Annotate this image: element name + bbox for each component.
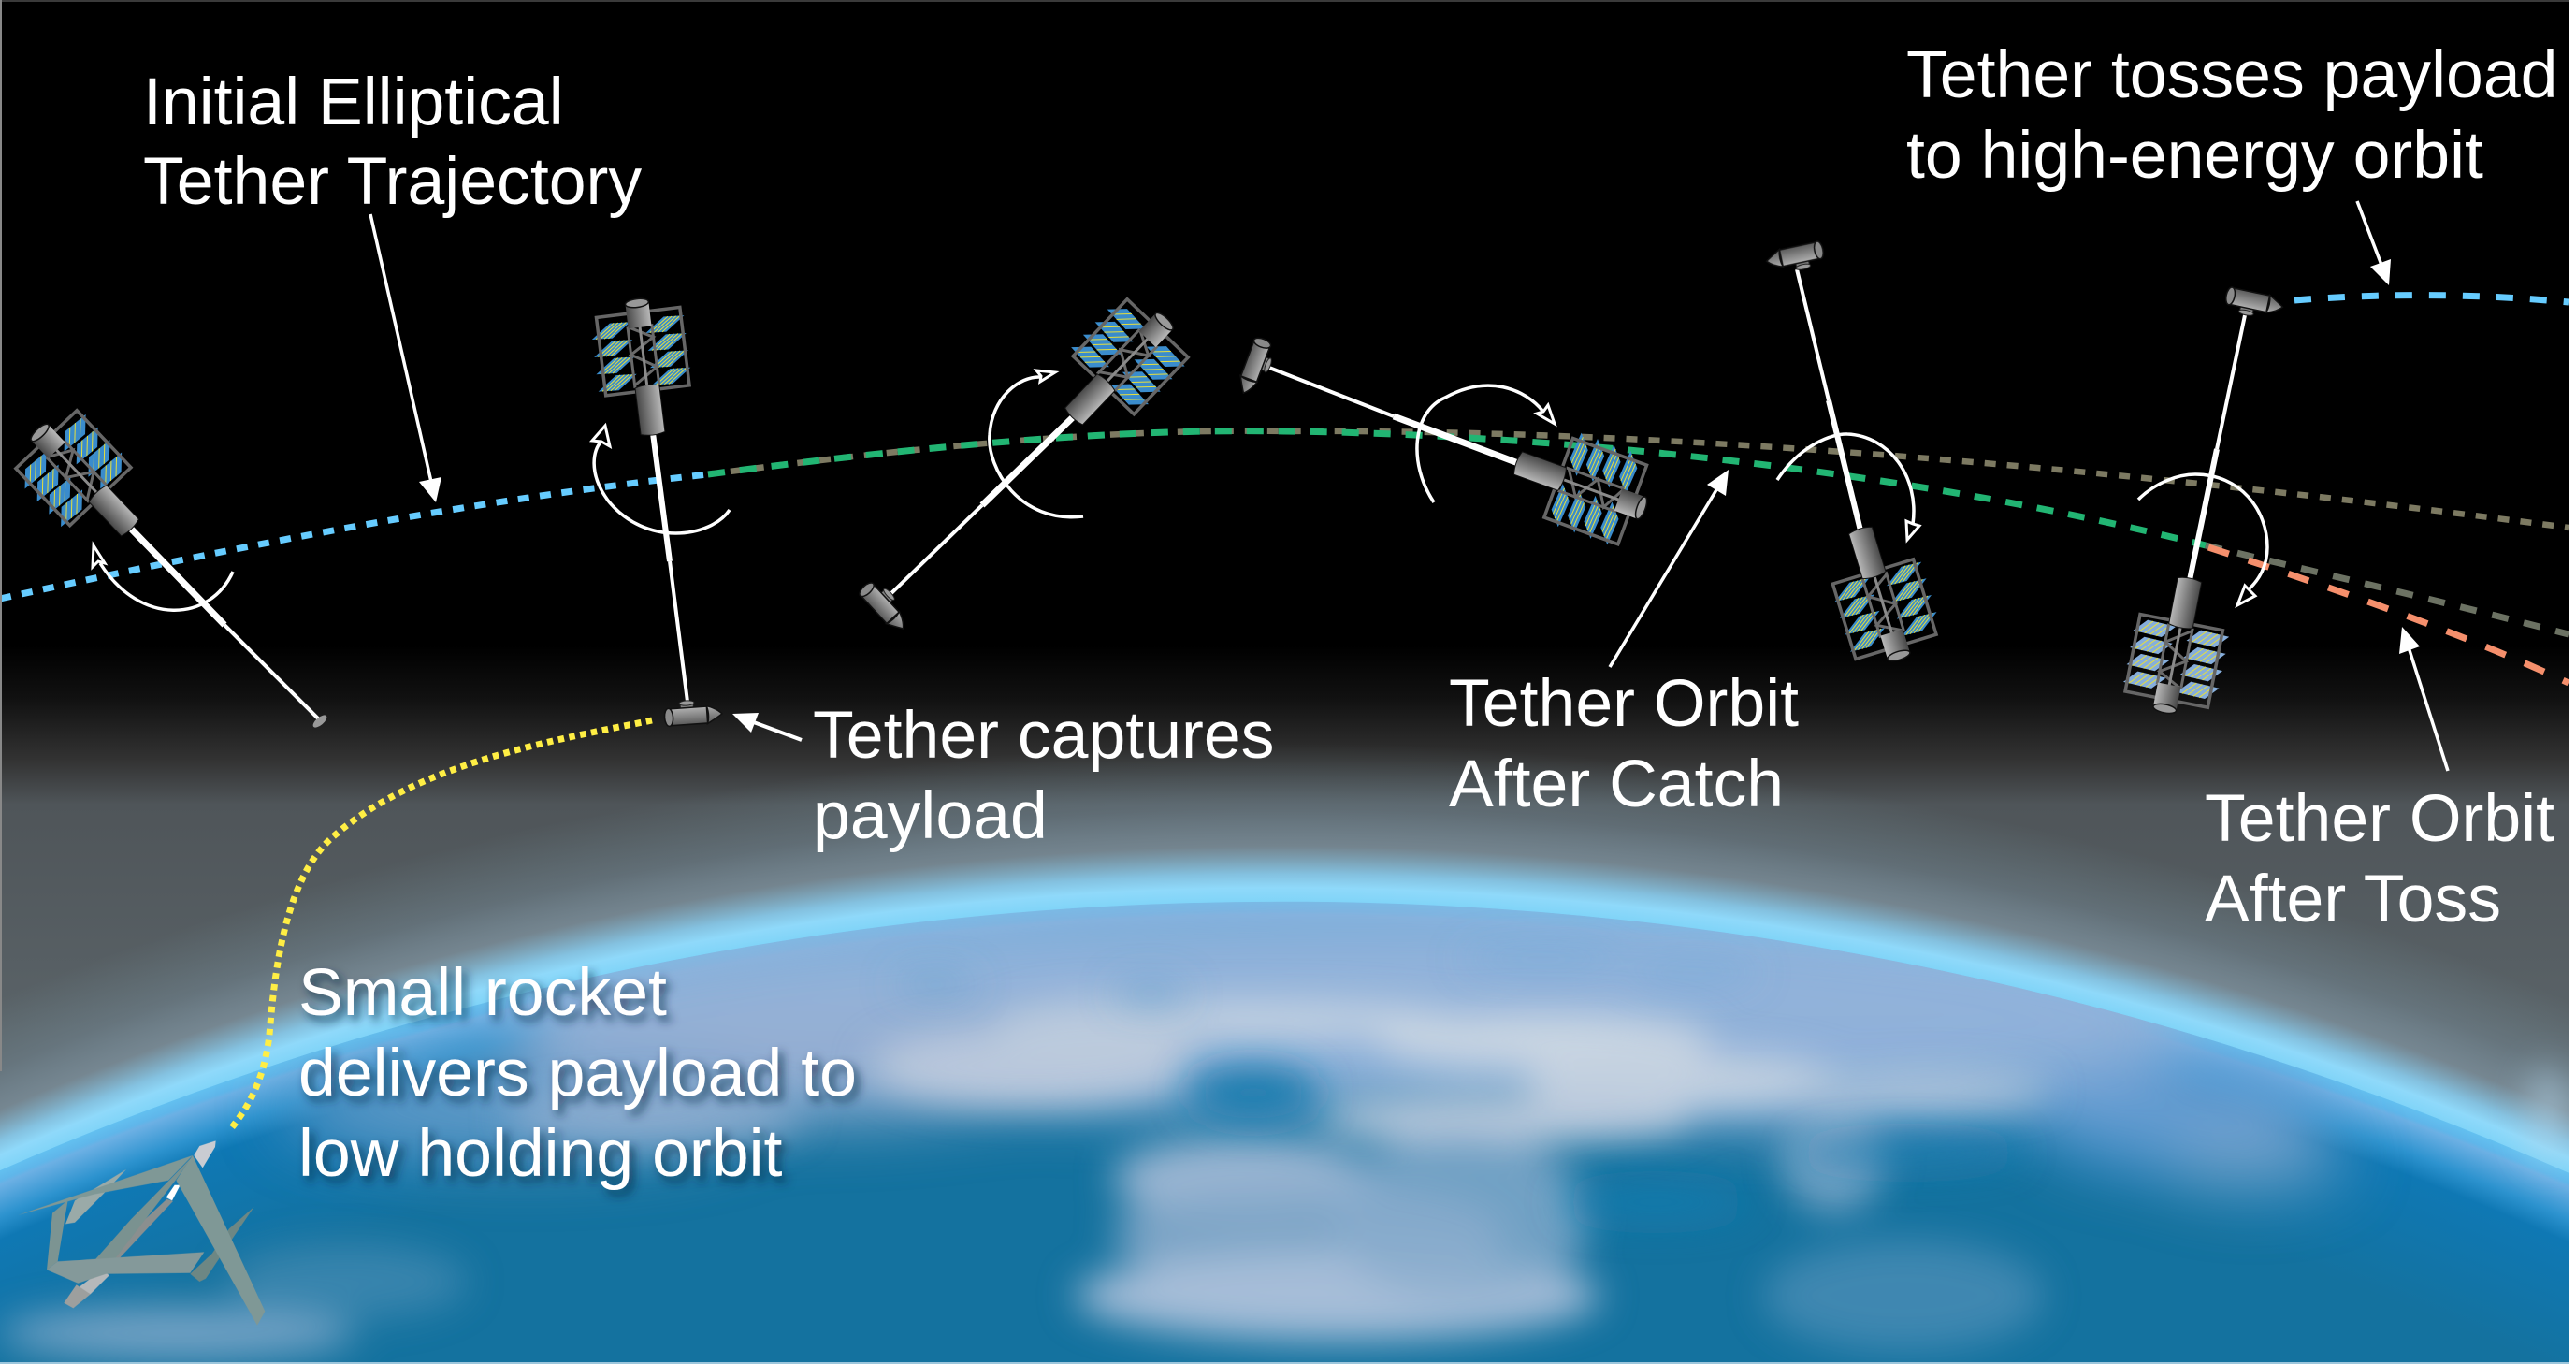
payload 1 (edge on) [311, 713, 328, 730]
frame edge: right margin [2569, 0, 2576, 1364]
dark gaps in clouds [893, 952, 2020, 1221]
label: tether tosses payload: to high-energy orbit [1906, 118, 2483, 193]
label: small rocket delivers payload: low holding orbit [298, 1116, 782, 1191]
tether orbit after catch (green dashed) [708, 431, 2206, 545]
satellite body 3 [1036, 284, 1200, 449]
tether 2 [653, 433, 687, 702]
earth with clouds [0, 902, 2576, 1364]
tether 3 [889, 416, 1074, 596]
left vertical [47, 1200, 68, 1270]
rotation arrow 1 [93, 545, 233, 610]
tethered satellite 2 [587, 294, 730, 727]
rocket payload trajectory (yellow dotted) [232, 720, 652, 1127]
label: initial elliptical tether trajectory: Initial Elliptical [143, 65, 564, 139]
icon: launch aircraft with rocket [18, 1140, 265, 1326]
payload 2 [663, 698, 723, 727]
payload 6 [2223, 286, 2284, 322]
lower horizontal wing [47, 1252, 204, 1284]
label: tether orbit after catch: After Catch [1449, 747, 1784, 821]
after catch continuation (gray-green dashed) [2206, 545, 2569, 634]
payload 5 [1765, 240, 1826, 276]
fuselage strake [94, 1156, 193, 1261]
tether 4 [1269, 368, 1518, 463]
payload 4 [1236, 336, 1279, 399]
label: tether captures payload: payload [813, 778, 1048, 853]
pointer arrow: orbit after toss [2399, 627, 2448, 771]
left rear fin [65, 1169, 126, 1224]
pointer arrow: tether captures payload [732, 713, 802, 740]
satellite body 1 [1, 398, 165, 563]
label: tether orbit after catch: Tether Orbit [1449, 666, 1799, 741]
pointer arrow: high-energy orbit [2357, 201, 2391, 285]
initial tether trajectory (blue dashed) [0, 474, 708, 599]
tethered satellite 3 [858, 284, 1200, 634]
high-energy payload orbit (cyan dashed) [2294, 296, 2569, 302]
big right wing [176, 1155, 265, 1326]
tether orbit after toss (salmon dashed) [2208, 547, 2569, 683]
atmosphere glow [0, 692, 2576, 1364]
satellite body 5 [1816, 515, 1946, 673]
initial orbit continuation (tan dashed) [708, 431, 2569, 528]
payload 3 [858, 576, 915, 634]
rotation arrow 6 [2138, 474, 2267, 605]
rotation arrow 2 [592, 426, 730, 533]
label: tether orbit after toss: Tether Orbit [2205, 781, 2554, 856]
earth surface [0, 902, 2576, 1364]
bright clouds [0, 1001, 2048, 1359]
tethered satellite 1 [1, 398, 328, 730]
label: tether tosses payload: Tether tosses payload [1906, 37, 2557, 112]
satellite body 4 [1500, 415, 1662, 553]
pointer arrow: orbit after catch [1610, 470, 1729, 667]
rocket [64, 1140, 216, 1308]
right rear fin [190, 1207, 254, 1282]
pointer arrow: initial trajectory [370, 214, 441, 502]
high haze [281, 903, 2348, 1192]
tethered satellite 5 [1765, 240, 1946, 673]
label: small rocket delivers payload: delivers payload to [298, 1036, 857, 1110]
tether 5 [1797, 269, 1860, 530]
label: tether captures payload: Tether captures [813, 698, 1274, 773]
satellite body 2 [587, 294, 698, 441]
upper left wing [18, 1155, 193, 1215]
tethered satellite 6 [2119, 286, 2284, 722]
tethered satellite 4 [1236, 336, 1662, 553]
label: initial elliptical tether trajectory: Tether Trajectory [143, 144, 642, 219]
tether 6 [2190, 315, 2245, 580]
satellite body 6 [2119, 570, 2238, 722]
rotation arrow 5 [1777, 434, 1919, 540]
tether 1 [130, 528, 320, 720]
label: tether orbit after toss: After Toss [2205, 862, 2501, 936]
rotation arrow 3 [990, 370, 1083, 517]
label: small rocket delivers payload: Small rocket [298, 955, 667, 1030]
rotation arrow 4 [1417, 385, 1555, 502]
edge glow near right limb [2528, 1065, 2569, 1162]
